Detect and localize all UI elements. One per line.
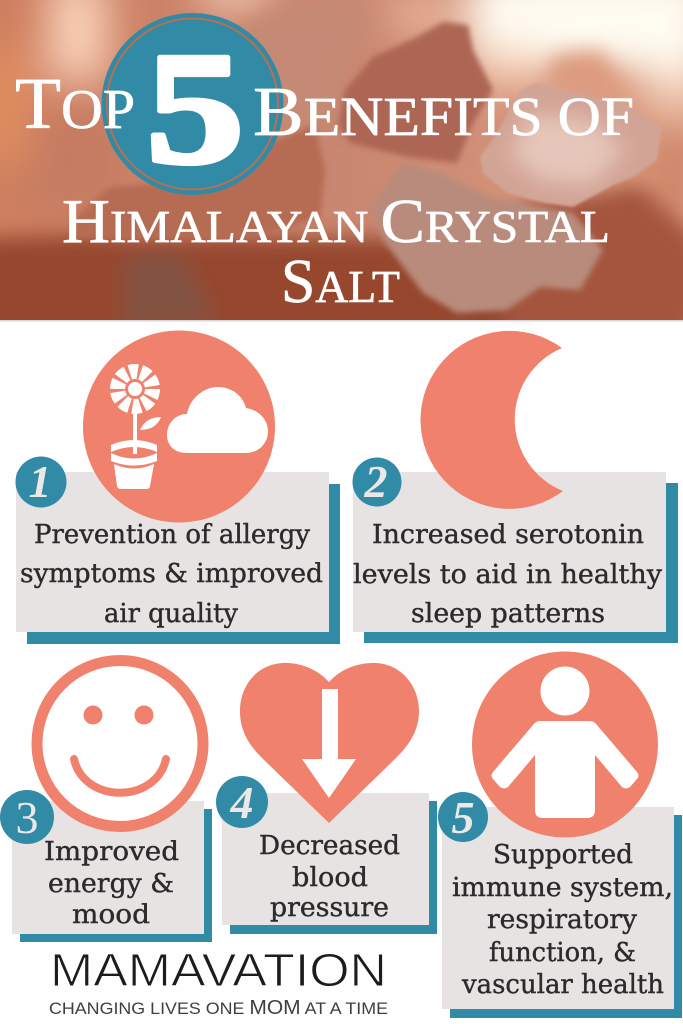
- number badge 4: 4: [230, 777, 254, 828]
- teal number five badge: [102, 13, 284, 197]
- icon: crescent moon: [421, 331, 563, 509]
- number badge 1: [16, 456, 66, 508]
- teal number five badge: 5: [146, 19, 244, 197]
- number badge 3: [0, 790, 54, 844]
- title: SALT: [281, 248, 400, 316]
- icon: heart with down arrow: [240, 663, 419, 823]
- number badge 2: [352, 456, 402, 507]
- hero photo of salt crystals: [0, 0, 683, 340]
- text: benefit 1: [20, 520, 323, 629]
- text: benefit 3: [44, 837, 179, 930]
- number badge 2: 2: [364, 456, 388, 507]
- number badge 5: [438, 792, 488, 843]
- icon: flower and cloud: [83, 330, 275, 522]
- tagline: CHANGING LIVES ONE MOM AT A TIME: [49, 997, 388, 1019]
- text: benefit 4: pressure: [270, 893, 389, 923]
- text: benefit 3: Improved: [44, 837, 179, 867]
- logo: Mamavation: [49, 944, 388, 1019]
- text: benefit 5: vascular health: [461, 970, 664, 1000]
- text: benefit 2: levels to aid in healthy: [353, 560, 662, 590]
- number badge 5: 5: [452, 792, 474, 843]
- number badge 1: 1: [28, 456, 52, 507]
- panel: benefit 2 serotonin: [352, 331, 678, 643]
- text: benefit 5: immune system,: [452, 873, 673, 903]
- panel: benefit 4 blood pressure: [216, 663, 437, 934]
- panel: benefit 3 energy: [0, 660, 212, 942]
- text: benefit 5: respiratory: [487, 905, 637, 935]
- panel: benefit 1 allergy: [16, 330, 340, 644]
- text: benefit 2: sleep patterns: [411, 599, 605, 629]
- text: benefit 2: Increased serotonin: [372, 520, 644, 550]
- title: [15, 63, 634, 316]
- text: benefit 2: [353, 520, 662, 629]
- text: benefit 5: [452, 840, 673, 1000]
- title: BENEFITS OF: [253, 74, 634, 151]
- number badge 4: [216, 776, 268, 828]
- text: benefit 1: Prevention of allergy: [34, 520, 310, 550]
- panel: benefit 5 immune: [438, 652, 682, 1018]
- text: benefit 3: energy &: [48, 869, 174, 899]
- text: benefit 5: Supported: [493, 840, 633, 870]
- title: HIMALAYAN CRYSTAL: [62, 188, 610, 256]
- icon: smiley face: [37, 660, 203, 826]
- icon: person: [472, 652, 658, 838]
- hero bottom edge: [0, 320, 683, 322]
- text: benefit 1: air quality: [104, 599, 238, 629]
- text: benefit 4: Decreased: [259, 831, 400, 861]
- text: benefit 4: blood: [292, 863, 368, 893]
- text: benefit 4: [259, 831, 400, 923]
- number badge 3: 3: [16, 792, 38, 843]
- title: TOP: [15, 63, 135, 144]
- text: benefit 5: function, &: [489, 938, 636, 968]
- text: benefit 1: symptoms & improved: [20, 559, 323, 589]
- logo: Mamavation: MAMAVATION: [50, 944, 387, 996]
- text: benefit 3: mood: [72, 900, 150, 930]
